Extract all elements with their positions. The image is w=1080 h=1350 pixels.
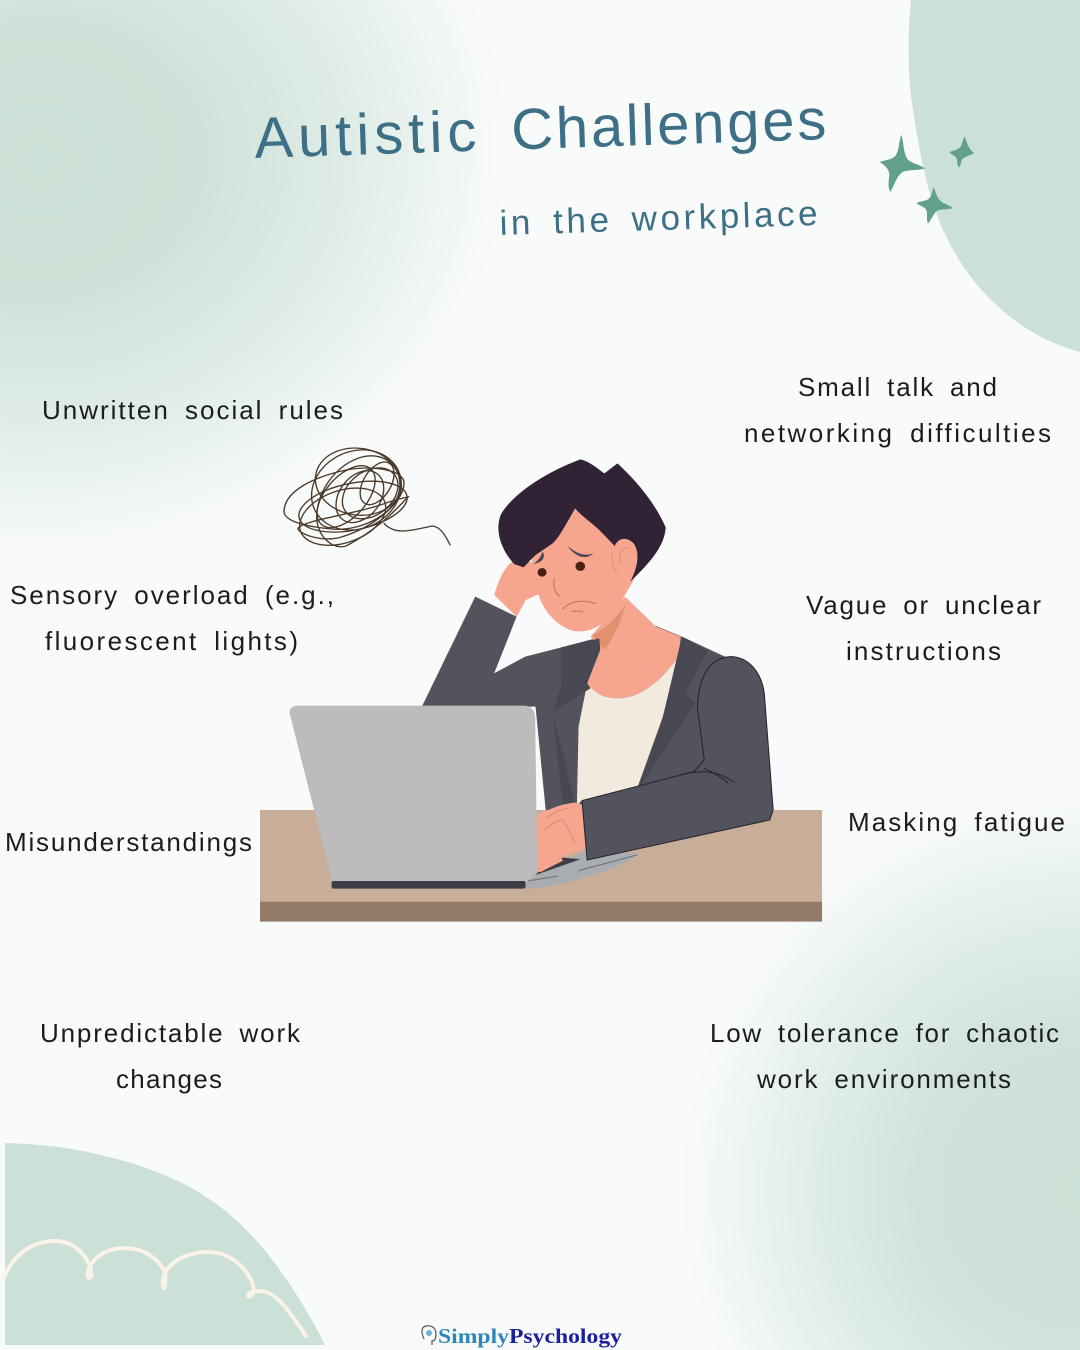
label: instructions: instructions	[846, 636, 1001, 666]
label: Unwritten social rules: Unwritten social rules	[42, 395, 343, 425]
laptop screen	[290, 706, 537, 882]
finger lines	[544, 808, 575, 843]
lapels	[553, 637, 708, 808]
laptop base	[332, 881, 526, 889]
icon: head	[422, 1326, 436, 1345]
title: Autistic	[253, 99, 477, 171]
logo: Simply Psychology	[422, 1324, 623, 1348]
label: networking difficulties: networking difficulties	[744, 418, 1051, 448]
torso jacket	[422, 597, 773, 860]
icon: cream scalloped line	[4, 1241, 306, 1336]
ear detail	[612, 547, 629, 573]
illustration: stressed worker at laptop	[260, 434, 822, 922]
keyboard	[525, 852, 639, 889]
title: Challenges	[510, 87, 827, 162]
wordmark: Simply Psychology	[438, 1324, 623, 1348]
keys	[536, 857, 580, 875]
forearm sleeve	[582, 657, 773, 860]
hand on keyboard	[536, 803, 587, 872]
neck shadow	[592, 603, 626, 650]
corner shape: bottom left	[5, 1143, 325, 1345]
eyes	[538, 562, 585, 577]
subtitle: in the workplace	[499, 194, 818, 243]
eyebrows	[534, 546, 593, 564]
background glow: bottom right	[660, 780, 1080, 1350]
label: Small talk and: Small talk and	[798, 372, 997, 402]
table	[260, 810, 822, 902]
label: changes: changes	[116, 1064, 222, 1094]
corner shape: top right	[909, 0, 1080, 352]
label: Unpredictable work: Unpredictable work	[40, 1018, 301, 1048]
icon: sparkles	[879, 135, 974, 223]
label: Sensory overload (e.g.,: Sensory overload (e.g.,	[10, 580, 334, 610]
label: Masking fatigue: Masking fatigue	[848, 807, 1065, 837]
neck and chest	[587, 597, 681, 698]
scribble above head	[284, 434, 450, 556]
sleeve crease	[692, 768, 735, 783]
label: Low tolerance for chaotic: Low tolerance for chaotic	[710, 1018, 1059, 1048]
face and ear	[532, 500, 641, 631]
label: Vague or unclear: Vague or unclear	[806, 590, 1041, 620]
raised hand	[494, 559, 541, 617]
finger over screen edge	[538, 852, 563, 872]
hair	[498, 459, 666, 582]
shirt	[577, 657, 678, 807]
label: Misunderstandings: Misunderstandings	[5, 827, 252, 857]
title	[253, 87, 827, 171]
nose and mouth	[554, 578, 596, 612]
table edge	[260, 902, 822, 922]
label: fluorescent lights): fluorescent lights)	[45, 626, 298, 656]
keyboard marks	[528, 855, 637, 881]
background glow: top left	[0, 0, 520, 600]
label: work environments: work environments	[756, 1064, 1011, 1094]
